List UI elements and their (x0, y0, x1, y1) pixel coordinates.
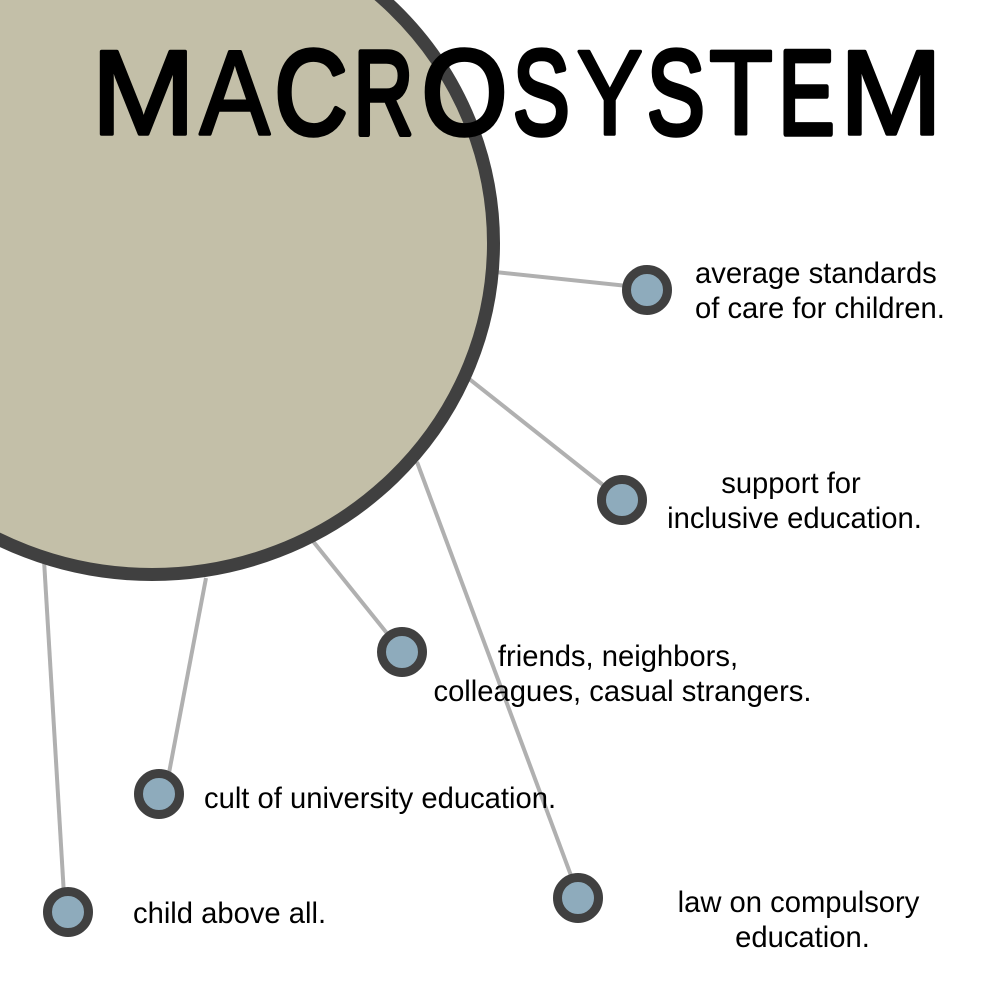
title: E (778, 26, 834, 160)
title: C (275, 26, 347, 160)
node: inclusive education (602, 468, 922, 535)
title: R (354, 26, 413, 160)
title: M (840, 26, 942, 160)
node: inclusive education: inclusive education. (667, 503, 922, 535)
title (91, 26, 942, 160)
title: S (513, 26, 570, 160)
node: university education (138, 774, 556, 815)
node: child above all: child above all. (133, 898, 326, 930)
title: Y (577, 26, 643, 160)
node: compulsory education law: law on compulsory (678, 887, 920, 919)
node: compulsory education law: education. (735, 922, 870, 954)
title: A (200, 26, 270, 160)
node: average standards: average standards (695, 258, 937, 290)
large macrosystem circle (0, 0, 494, 574)
node: compulsory education law (558, 878, 920, 954)
node: friends and neighbors (382, 632, 812, 708)
node: university education: cult of university education. (204, 783, 556, 815)
connector lines (44, 272, 647, 912)
node: average standards (626, 258, 945, 325)
title: S (647, 26, 705, 160)
node: inclusive education: support for (721, 468, 861, 500)
node: average standards: of care for children. (695, 293, 945, 325)
node: child above all (48, 892, 326, 932)
title: O (422, 26, 507, 160)
node: friends and neighbors: colleagues, casual strangers. (433, 676, 812, 708)
title: M (91, 26, 195, 160)
node: friends and neighbors: friends, neighbors, (498, 641, 738, 673)
title: T (709, 26, 773, 160)
